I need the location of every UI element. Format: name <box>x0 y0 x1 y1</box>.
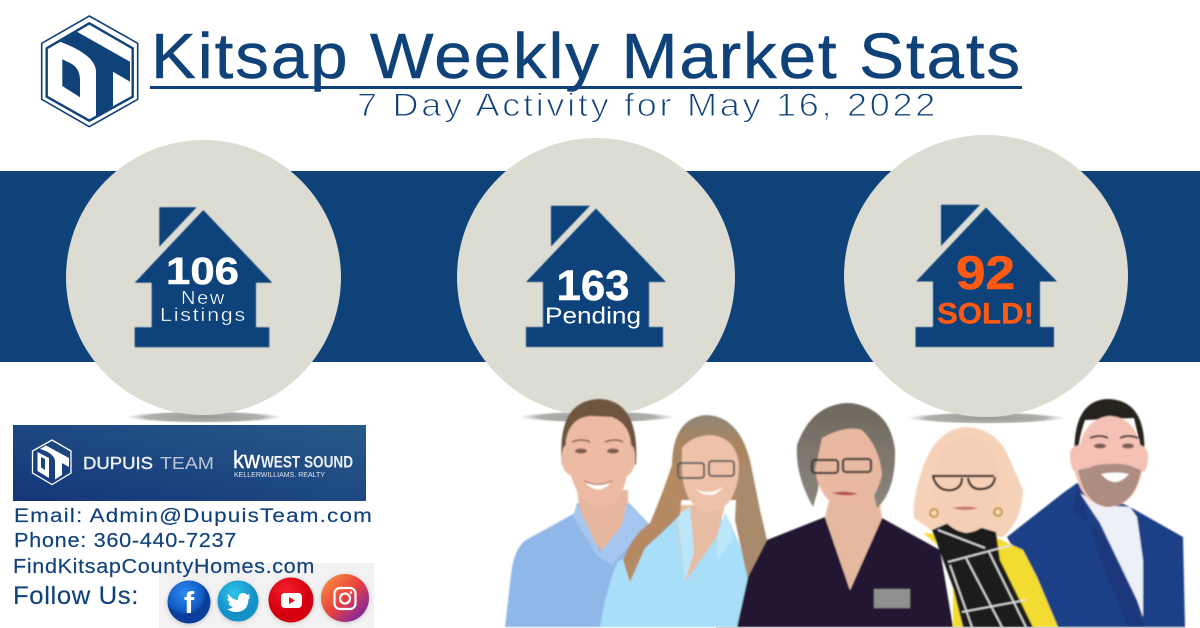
contact: phone: Phone: 360-440-7237 <box>14 530 237 552</box>
label: listings: Listings <box>160 305 247 325</box>
panel: new listings <box>66 140 341 415</box>
icon: facebook <box>168 580 210 624</box>
person 2 <box>600 415 767 627</box>
icon: house 2 <box>526 206 666 347</box>
title underline <box>150 86 1022 89</box>
icon: facebook: f <box>184 585 195 620</box>
shadow under circle 1 <box>125 411 283 423</box>
team banner <box>13 425 366 501</box>
stat: 163: 163 <box>556 262 630 310</box>
follow us label: Follow Us: <box>13 582 139 610</box>
contact: email: Email: Admin@DupuisTeam.com <box>14 506 373 527</box>
base line under photo <box>716 627 1185 628</box>
icon: twitter <box>218 580 258 622</box>
person 5 <box>1007 399 1185 627</box>
person 4 <box>914 427 1058 627</box>
shadow under circle 2 <box>518 411 676 423</box>
right hair strand <box>735 465 767 580</box>
subtitle: 7 Day Activity for May 16, 2022 <box>357 87 938 123</box>
panel: sold <box>844 135 1128 417</box>
text: dupuis team <box>83 453 214 473</box>
text: kw west sound: kw <box>233 447 261 474</box>
person 1 <box>505 399 650 627</box>
stat: 106: 106 <box>166 251 239 293</box>
label: pending: Pending <box>545 302 641 328</box>
stat: 92: 92 <box>956 246 1015 299</box>
text: dupuis team: DUPUIS <box>83 453 153 473</box>
text: kw west sound: KELLERWILLIAMS. REALTY <box>234 470 325 479</box>
team photo group <box>505 399 1185 627</box>
text: dupuis team: TEAM <box>160 453 214 473</box>
icon: youtube <box>268 578 314 624</box>
person 3 <box>737 403 953 627</box>
icon: banner logo <box>32 440 71 484</box>
shadow under circle 3 <box>906 412 1066 424</box>
icon: instagram <box>321 574 369 623</box>
contact: website: FindKitsapCountyHomes.com <box>13 556 315 578</box>
label: sold: SOLD! <box>937 298 1034 330</box>
logo: DT hexagon <box>42 16 138 127</box>
text: kw west sound <box>233 447 353 479</box>
social icons background <box>159 563 374 628</box>
left hair strand <box>623 465 684 582</box>
title: Kitsap Weekly Market Stats <box>151 20 1022 92</box>
icon: house 1 <box>135 207 272 347</box>
text: kw west sound: WEST SOUND <box>261 452 353 472</box>
panel: pending <box>457 138 735 416</box>
blue band <box>0 171 1200 362</box>
label: new: New <box>181 288 226 308</box>
icon: house 3 <box>916 205 1057 347</box>
